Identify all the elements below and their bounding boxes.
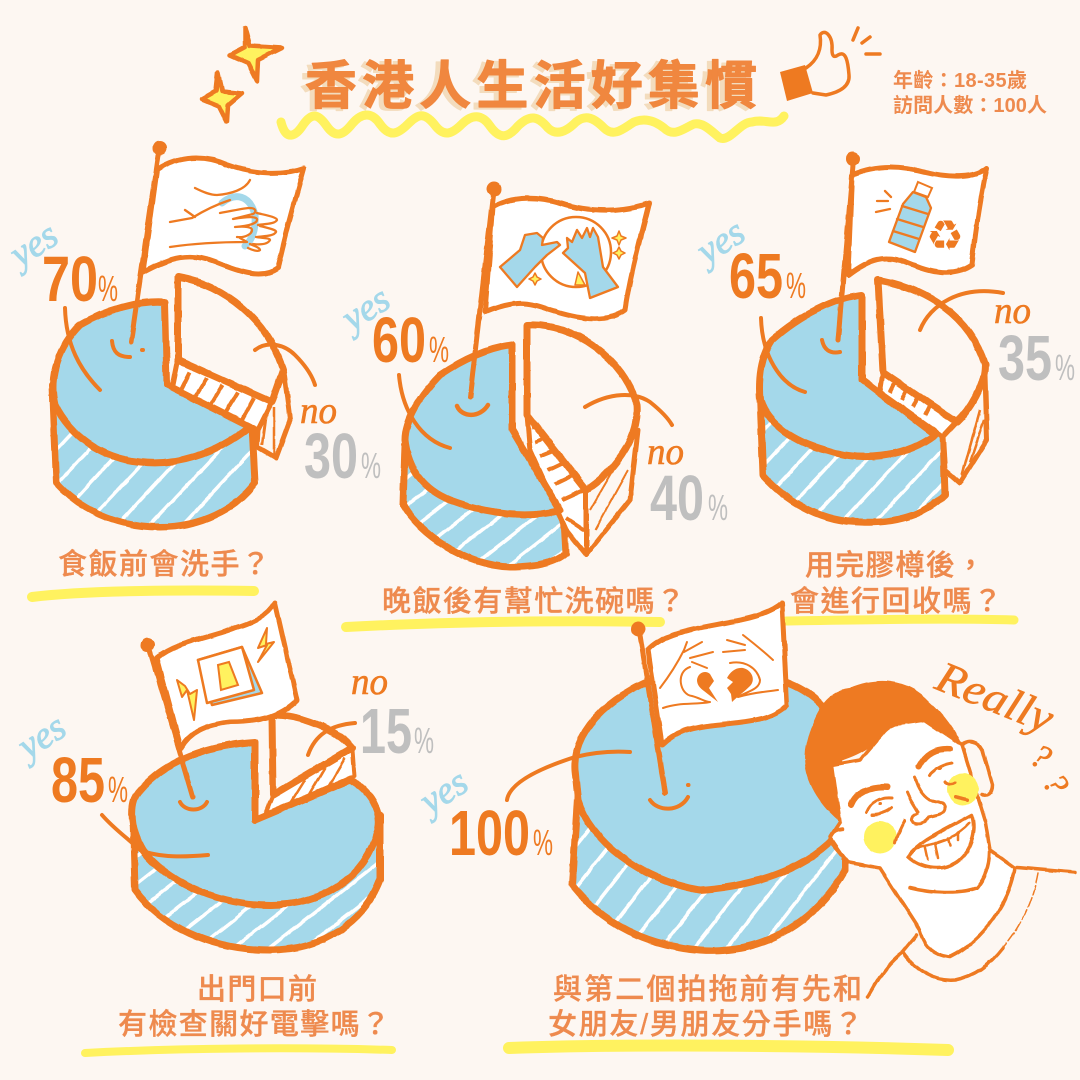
question: 用完膠樽後， xyxy=(805,549,985,582)
callout lines xyxy=(399,375,672,448)
title: 香港人生活好集慣 xyxy=(300,60,752,118)
handwritten remark: Really xyxy=(928,651,1061,743)
yes label: yes xyxy=(7,706,74,770)
eyebrows xyxy=(851,749,950,805)
question: 會進行回收嗎？ xyxy=(790,585,1002,618)
no percent: % xyxy=(708,487,728,528)
yes percent: 60 xyxy=(372,304,426,376)
yes percent: 85 xyxy=(51,744,105,816)
handwritten remark: ? xyxy=(1024,737,1057,777)
smile xyxy=(457,405,488,415)
panel: breaking up 100 xyxy=(409,603,948,1050)
smile xyxy=(650,785,688,809)
smile xyxy=(112,341,143,357)
callout lines xyxy=(102,723,355,856)
callout line xyxy=(507,752,630,800)
illustration: laughing man xyxy=(805,681,1075,997)
question: 與第二個拍拖前有先和 xyxy=(553,973,862,1006)
title: 香港人生活好集慣 xyxy=(305,58,757,116)
no percent: 35 xyxy=(998,322,1052,394)
question xyxy=(790,549,1002,618)
icon: sparkles xyxy=(202,28,282,122)
yes percent: % xyxy=(98,268,118,309)
face and neck xyxy=(830,720,1015,957)
question: 出門口前 xyxy=(197,973,317,1006)
question xyxy=(118,973,390,1041)
pie chart xyxy=(572,675,845,950)
pie chart xyxy=(760,280,987,522)
title wavy underline xyxy=(281,115,784,139)
yes percent: % xyxy=(786,265,806,306)
question: 女朋友/男朋友分手嗎？ xyxy=(548,1008,863,1041)
no percent: 40 xyxy=(650,462,704,534)
yellow underline xyxy=(346,621,660,627)
panel: washing hands 70/30 xyxy=(0,141,381,597)
no label: no xyxy=(351,661,388,703)
handwritten remark: ? xyxy=(1035,768,1076,801)
smile xyxy=(822,340,840,352)
yes percent: 65 xyxy=(729,240,783,312)
smile xyxy=(908,815,974,868)
yes label: yes xyxy=(0,214,66,278)
icon: plastic bottle and recycling xyxy=(876,182,964,260)
yes percent: 70 xyxy=(42,243,98,315)
handwritten remark xyxy=(928,651,1076,801)
question: 晚飯後有幫忙洗碗嗎？ xyxy=(382,585,685,618)
survey info: 訪問人數：100人 xyxy=(893,94,1047,117)
no percent: % xyxy=(361,445,381,486)
icon: gloves and plate xyxy=(500,217,626,298)
yes label: yes xyxy=(686,211,753,275)
pie chart xyxy=(132,715,380,950)
panel: light switch 85/15 xyxy=(7,603,434,1053)
yellow underline xyxy=(85,1048,392,1053)
question: 食飯前會洗手？ xyxy=(58,548,270,581)
yes percent: % xyxy=(429,329,449,370)
flag xyxy=(131,141,304,342)
flag xyxy=(838,152,987,340)
no label: no xyxy=(300,390,337,432)
jaw and shirt xyxy=(868,852,1075,997)
no label: no xyxy=(994,290,1031,332)
yellow underline xyxy=(509,1046,948,1050)
yes label: yes xyxy=(409,761,476,825)
yellow underline xyxy=(786,619,1014,621)
panel: recycling 65/35 xyxy=(686,152,1075,621)
panel: washing dishes 60/40 xyxy=(331,182,728,627)
pie chart xyxy=(52,277,290,527)
cheeks xyxy=(864,773,979,853)
flag xyxy=(470,182,649,397)
no percent: 15 xyxy=(360,695,412,767)
hair xyxy=(805,681,962,820)
question: 有檢查關好電擊嗎？ xyxy=(118,1008,390,1041)
icon: light switch xyxy=(177,628,274,720)
yellow underline xyxy=(32,591,254,597)
flag xyxy=(141,603,297,797)
question xyxy=(548,973,863,1041)
callout lines xyxy=(761,291,1003,392)
icon: thumbs up xyxy=(780,28,880,101)
icon: plastic bottle and recycling: ♻ xyxy=(926,211,964,260)
smile xyxy=(180,802,207,810)
ears xyxy=(830,741,992,862)
survey info: 年齡：18-35歲 xyxy=(893,69,1027,92)
survey info xyxy=(893,69,1047,117)
yes percent: % xyxy=(108,769,128,810)
no percent: 30 xyxy=(304,420,358,492)
icon: washing hands xyxy=(170,180,277,251)
yes percent: % xyxy=(533,822,553,863)
callout lines xyxy=(65,308,315,390)
yes percent: 100 xyxy=(449,797,530,869)
pie chart xyxy=(403,325,638,567)
flag xyxy=(630,603,787,793)
eyes and nose xyxy=(866,763,968,843)
icon: broken heart and hands xyxy=(660,635,778,708)
yes label: yes xyxy=(331,278,398,342)
no label: no xyxy=(647,431,684,473)
no percent: % xyxy=(414,720,434,761)
